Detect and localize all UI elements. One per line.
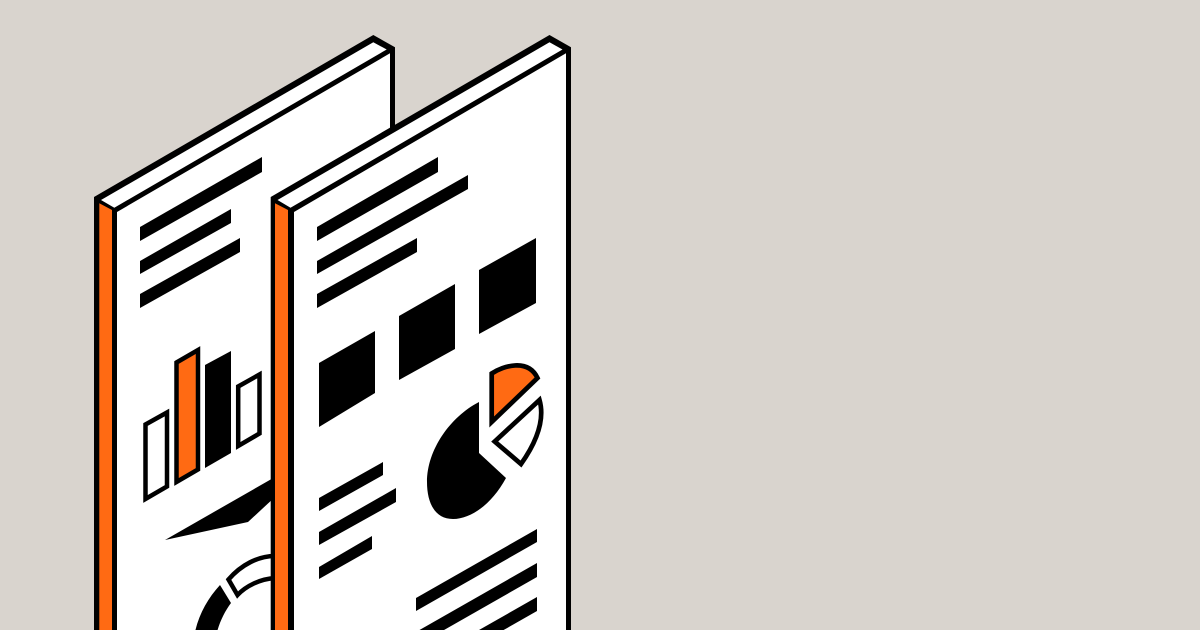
panel: back document <box>94 35 395 630</box>
pie chart <box>427 365 541 519</box>
front document page <box>294 53 566 630</box>
back document orange spine <box>99 203 112 630</box>
short text lines <box>319 462 396 579</box>
back document top edge <box>101 42 387 208</box>
arrow shape <box>165 477 275 540</box>
front document outline <box>271 35 571 630</box>
front document heading lines <box>317 157 468 308</box>
panel: front document <box>271 35 571 630</box>
back document text lines <box>140 157 262 308</box>
three black squares <box>319 238 536 427</box>
back document outline <box>94 35 395 630</box>
long text lines <box>416 529 537 630</box>
front document top edge <box>278 42 562 208</box>
bar chart <box>146 350 260 499</box>
back document page <box>117 53 390 630</box>
donut chart <box>195 556 275 630</box>
front document orange spine <box>275 203 288 630</box>
